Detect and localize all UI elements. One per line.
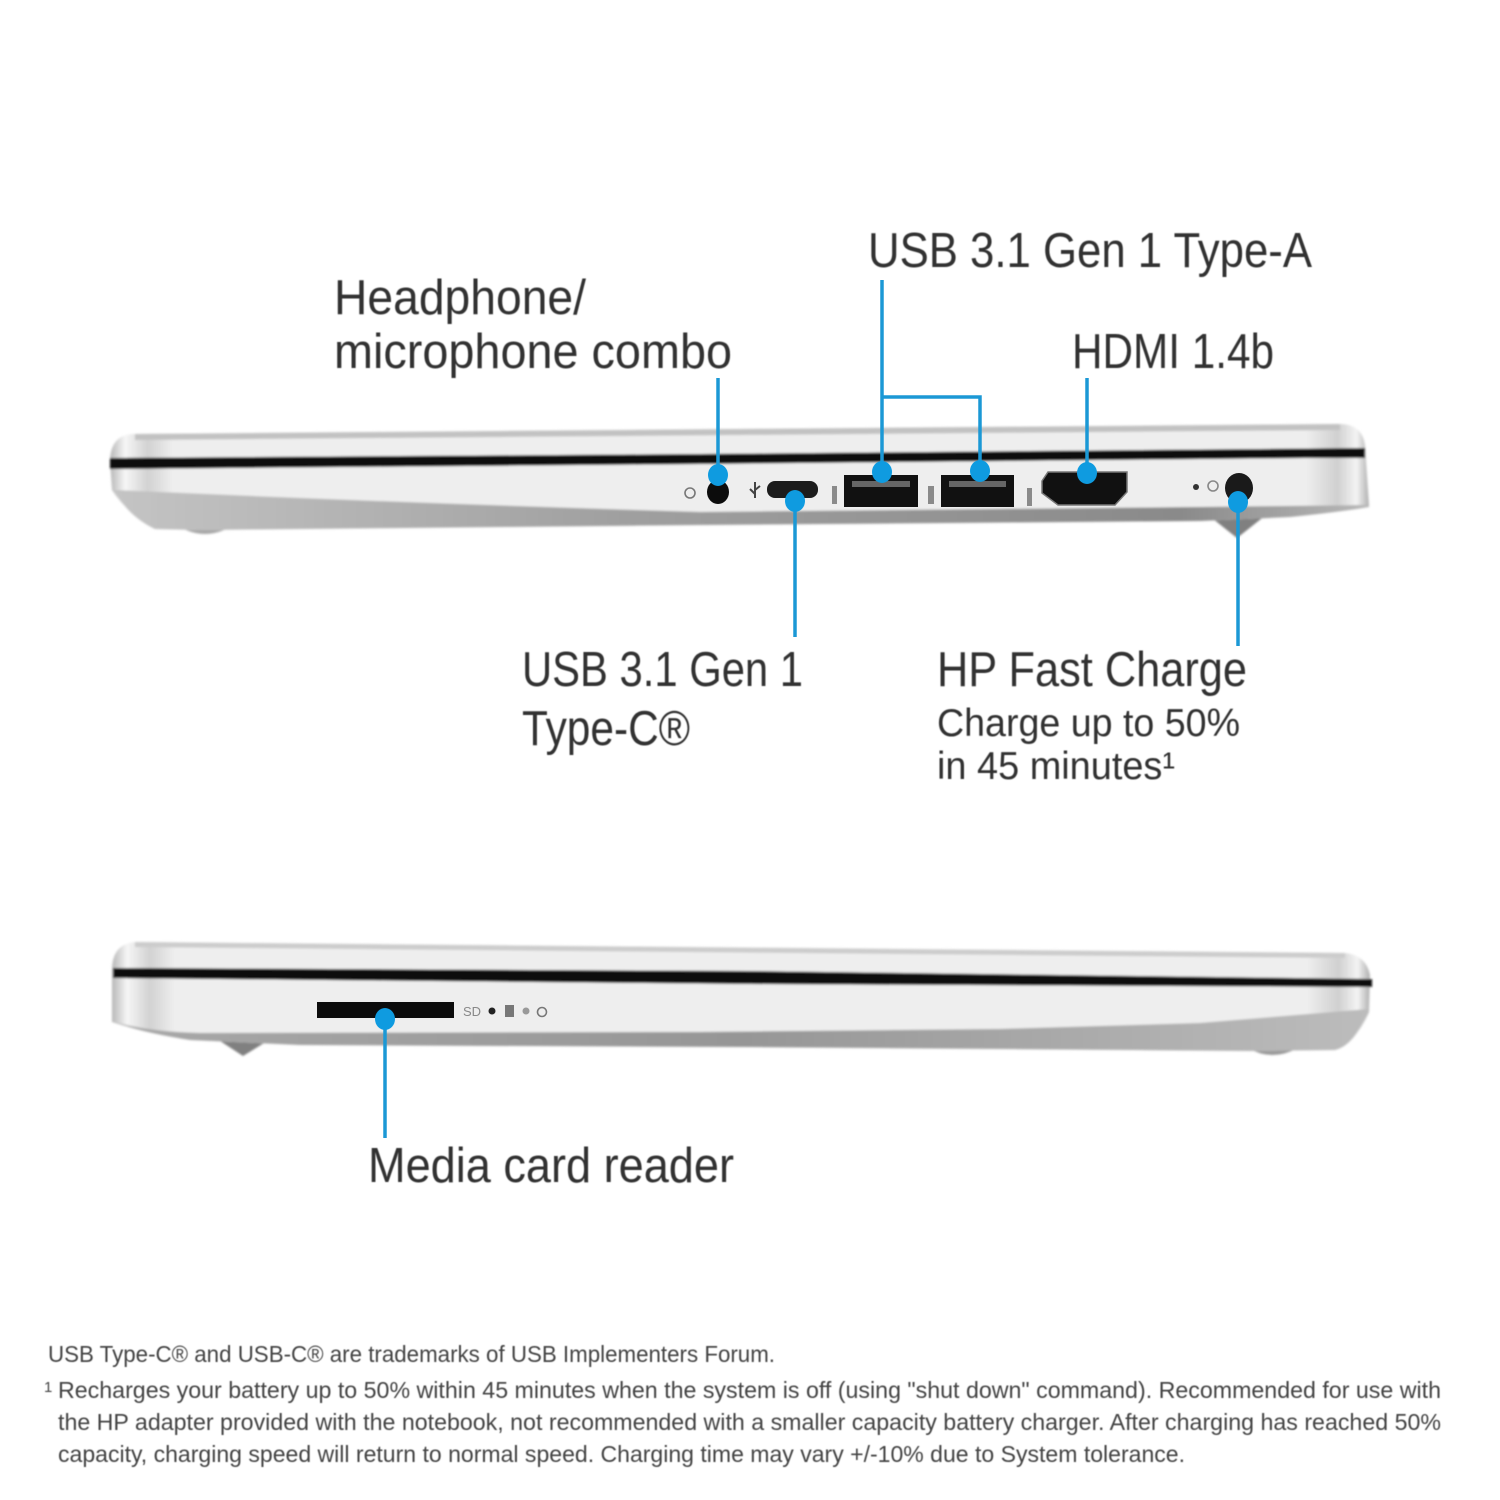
port labels bbox=[832, 486, 1032, 506]
icon: headset bbox=[685, 488, 695, 498]
callout: usb-c connector bbox=[785, 490, 805, 637]
hinge gap bbox=[113, 968, 1372, 987]
underside shading bbox=[114, 1009, 1369, 1051]
footnotes bbox=[44, 1341, 1441, 1467]
foot: left bbox=[178, 526, 232, 534]
callout: media card connector bbox=[375, 1008, 395, 1138]
laptop: right side view bbox=[112, 942, 1372, 1056]
label: usb type-c: Type-C® bbox=[522, 702, 690, 756]
foot: right hinge bbox=[1208, 515, 1266, 538]
hdmi port bbox=[1042, 472, 1127, 505]
usb-a port 1 bbox=[844, 475, 918, 507]
footnotes: USB Type-C® and USB-C® are trademarks of USB Implementers Forum. bbox=[48, 1341, 775, 1367]
label: usb type-c: USB 3.1 Gen 1 bbox=[522, 643, 803, 697]
power jack bbox=[1225, 473, 1253, 503]
usb-a port 2 bbox=[941, 475, 1014, 507]
charge led and icon bbox=[1193, 481, 1218, 491]
usb-c port bbox=[767, 481, 818, 498]
label: media card reader: Media card reader bbox=[368, 1139, 734, 1193]
callout: headphone connector bbox=[708, 378, 728, 486]
media card slot bbox=[317, 1002, 454, 1018]
label: hp fast charge: Charge up to 50% bbox=[937, 702, 1240, 745]
foot: right bbox=[1248, 1048, 1298, 1055]
label: headphone microphone combo bbox=[334, 271, 732, 379]
underside wedge bbox=[114, 490, 1369, 530]
label: headphone microphone combo: microphone combo bbox=[334, 325, 732, 379]
callout: usb-a connector bbox=[872, 280, 990, 483]
callout: hdmi connector bbox=[1077, 378, 1097, 484]
ports: right side bbox=[317, 1002, 546, 1019]
lid and base body bbox=[110, 424, 1369, 530]
lid and base body bbox=[112, 942, 1370, 1051]
lid top shading bbox=[135, 424, 1340, 440]
callout: fast charge connector bbox=[1228, 491, 1248, 646]
ports: left side bbox=[685, 472, 1253, 507]
label: hp fast charge bbox=[937, 643, 1247, 788]
footnotes: the HP adapter provided with the notebook, not recommended with a smaller capacity battery charger. After charging has reached 50% bbox=[58, 1409, 1441, 1435]
lid top shading bbox=[135, 942, 1345, 958]
status icons bbox=[463, 1004, 546, 1019]
label: hp fast charge: HP Fast Charge bbox=[937, 643, 1247, 697]
label: usb type-a: USB 3.1 Gen 1 Type-A bbox=[868, 224, 1312, 278]
footnotes: Recharges your battery up to 50% within 45 minutes when the system is off (using "shut down" command). Recommended for use with bbox=[58, 1377, 1441, 1403]
label: headphone microphone combo: Headphone/ bbox=[334, 271, 586, 325]
label: hp fast charge: in 45 minutes¹ bbox=[937, 745, 1175, 788]
footnotes: 1 bbox=[44, 1379, 52, 1396]
status icons: SD bbox=[463, 1004, 481, 1019]
hinge gap bbox=[110, 448, 1365, 469]
label: usb type-c bbox=[522, 643, 803, 756]
icon: usb bbox=[750, 482, 760, 498]
laptop: left side view bbox=[110, 424, 1369, 538]
footnotes: capacity, charging speed will return to normal speed. Charging time may vary +/-10% due to System tolerance. bbox=[58, 1441, 1185, 1467]
foot: left bbox=[214, 1037, 274, 1056]
headphone jack bbox=[707, 480, 729, 504]
label: hdmi: HDMI 1.4b bbox=[1072, 325, 1274, 379]
